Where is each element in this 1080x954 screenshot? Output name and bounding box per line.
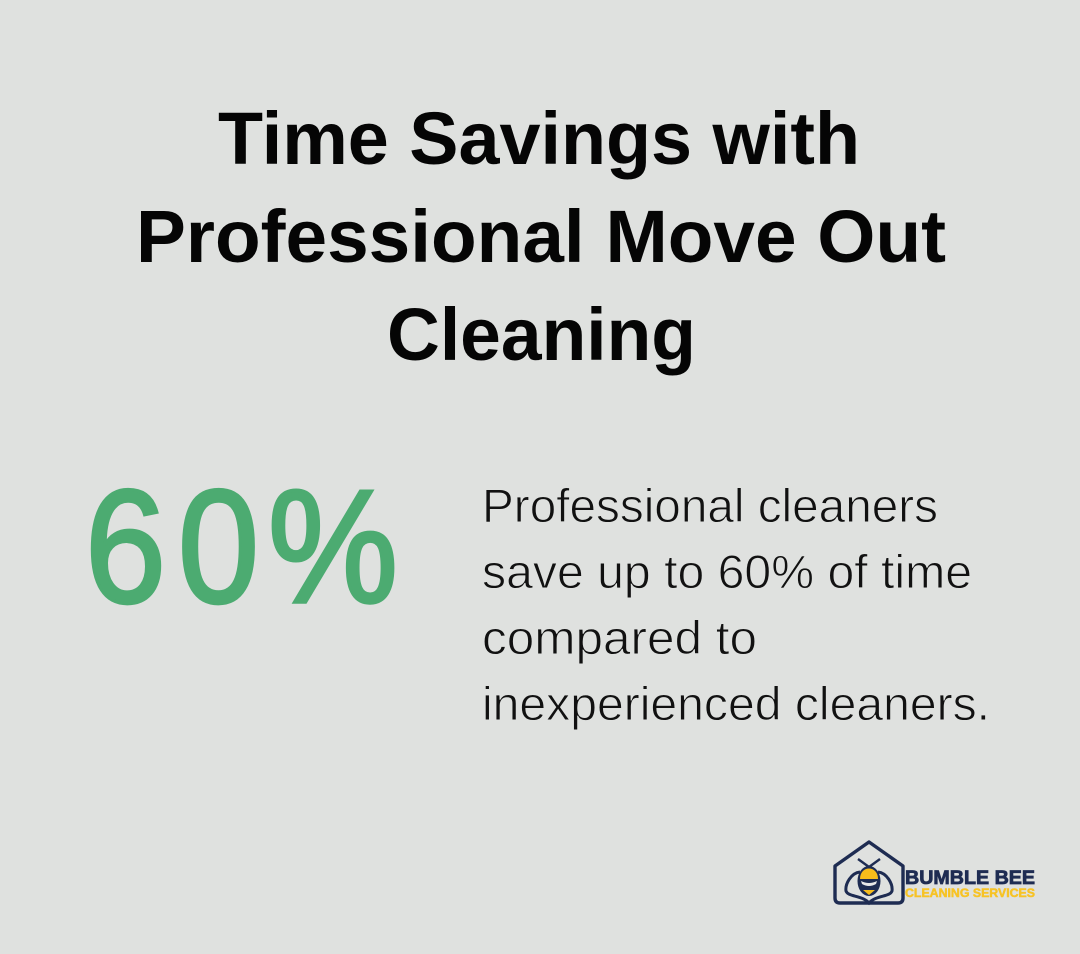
statistic: 60%: 0 <box>178 457 259 637</box>
icon: house outline with bee <box>835 842 903 903</box>
title: Time Savings with <box>218 97 860 180</box>
statistic: 60%: % <box>268 457 398 637</box>
description text: compared to <box>482 611 757 664</box>
statistic: 60%: 6 <box>85 457 166 637</box>
title: Professional Move Out <box>136 195 946 278</box>
logo tagline: CLEANING SERVICES <box>905 886 1035 900</box>
description text: save up to 60% of time <box>482 545 972 598</box>
description text <box>482 479 990 730</box>
logo wordmark: BUMBLE BEE <box>905 867 1035 889</box>
description text: inexperienced cleaners. <box>482 677 990 730</box>
logo: Bumble Bee Cleaning Services <box>835 842 1035 903</box>
title <box>136 97 946 376</box>
description text: Professional cleaners <box>482 479 938 532</box>
title: Cleaning <box>387 293 696 376</box>
